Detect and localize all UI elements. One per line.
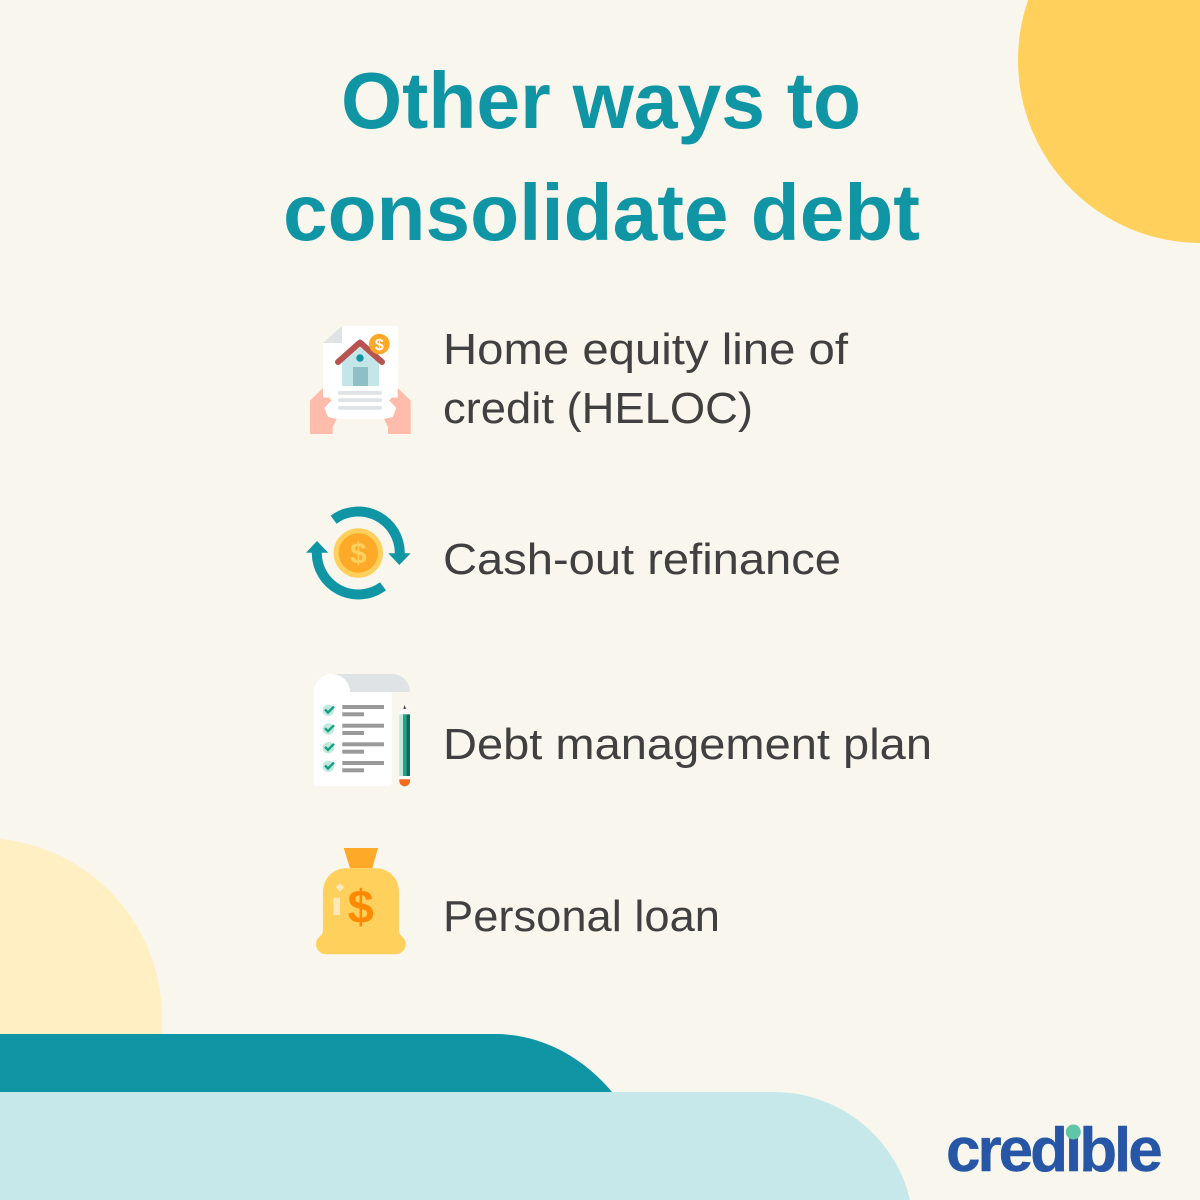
label: cash-out refinance: Cash-out refinance (443, 535, 841, 584)
decorative shape: teal wave (0, 1034, 612, 1200)
title: consolidate debt (283, 168, 920, 257)
label: HELOC (443, 325, 849, 433)
list item: debt management plan (314, 674, 932, 786)
decorative circle: bottom left (0, 838, 162, 1198)
label: personal loan: Personal loan (443, 892, 720, 941)
icon: checklist and pencil (314, 674, 410, 786)
icon: coin with circular arrows: $ (350, 538, 367, 570)
decorative shape: light blue wave (0, 1092, 910, 1200)
icon: house document held in hands: $ (375, 337, 384, 354)
icon: money bag (316, 848, 406, 954)
title (283, 56, 920, 257)
icon: house document held in hands (310, 326, 411, 434)
decorative circle: top right (1018, 0, 1200, 243)
label: HELOC: Home equity line of (443, 325, 849, 374)
icon: money bag: $ (348, 880, 374, 933)
label: debt management plan: Debt management plan (443, 720, 932, 769)
title: Other ways to (341, 56, 861, 145)
list item: personal loan (316, 848, 720, 954)
list item: HELOC (310, 325, 849, 434)
icon: coin with circular arrows (306, 512, 411, 594)
label: HELOC: credit (HELOC) (443, 384, 753, 433)
logo: credible: credible (946, 1116, 1161, 1185)
list item: cash-out refinance (306, 512, 841, 594)
